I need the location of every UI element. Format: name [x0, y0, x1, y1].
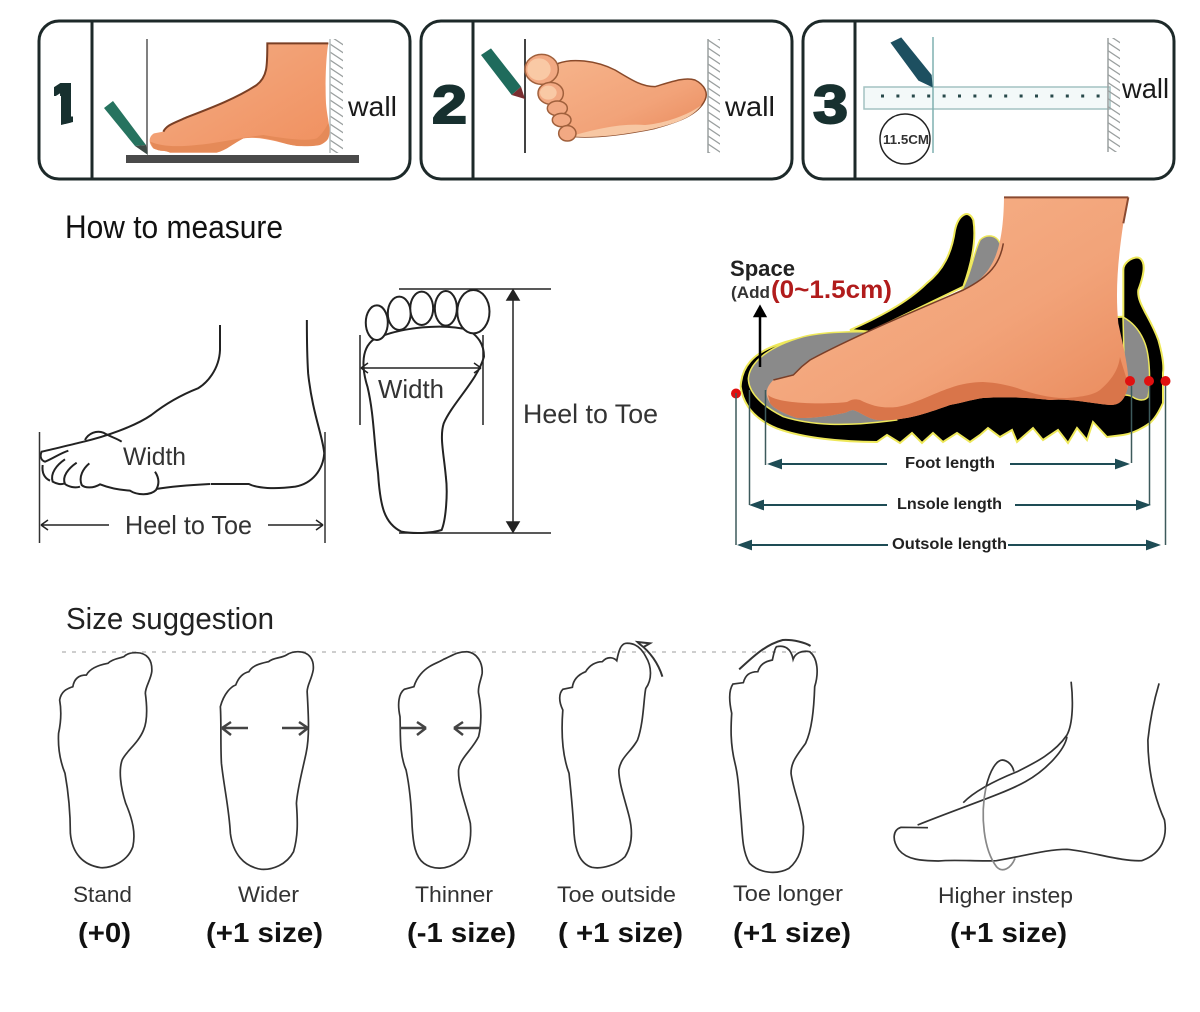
- foot outline: [560, 643, 650, 868]
- heading: how to measure: How to measure: [65, 209, 283, 245]
- foot length arrow: [770, 460, 1127, 468]
- foot top view with toes: [525, 54, 706, 141]
- label: Toe longer: [733, 881, 843, 906]
- label: Higher instep: [938, 883, 1073, 908]
- label: width: Width: [378, 374, 444, 404]
- toe reference dashed line: [62, 651, 822, 653]
- size change: (+0): [78, 917, 131, 948]
- shoe and foot illustration: [741, 197, 1163, 443]
- measuring guide line: [524, 39, 526, 153]
- foot side outline with instep ring: [894, 682, 1165, 870]
- label: heel to toe: Heel to Toe: [125, 510, 252, 540]
- size change: (-1 size): [407, 917, 516, 948]
- diagram: foot sole outline: [360, 289, 658, 533]
- red measuring dots: [731, 376, 1170, 398]
- label: space: Space: [730, 256, 795, 281]
- thinner arrows: [400, 722, 481, 735]
- toe arrow: [638, 642, 662, 677]
- measuring guide line: [146, 39, 148, 153]
- step number 2: 2: [432, 75, 467, 135]
- heading: size suggestion: Size suggestion: [66, 601, 274, 636]
- panel: step 3: [803, 21, 1174, 179]
- sole drawing with toes: [363, 290, 489, 533]
- size card: thinner: [399, 652, 516, 948]
- ruler with dots: [864, 87, 1110, 109]
- foot outline: [399, 652, 482, 868]
- size card: wider: [206, 652, 323, 948]
- label: width: Width: [123, 443, 186, 471]
- length extent lines: [736, 386, 1166, 545]
- measurement circle: 11.5CM: [883, 132, 929, 147]
- label: wall: wall: [1121, 73, 1169, 104]
- step number 3: 3: [813, 75, 848, 135]
- size change: ( +1 size): [558, 917, 683, 948]
- label: wall: wall: [724, 91, 775, 122]
- label: foot length: Foot length: [905, 455, 995, 472]
- label: add: (Add: [731, 283, 770, 302]
- label: Thinner: [415, 882, 493, 907]
- label: Toe outside: [557, 882, 676, 907]
- foot outline: [220, 652, 313, 869]
- label: heel to toe: Heel to Toe: [523, 399, 658, 429]
- label: Stand: [73, 882, 132, 907]
- side foot drawing: [41, 320, 324, 494]
- space arrow: [755, 307, 765, 367]
- size card: higher instep: [894, 682, 1165, 948]
- size card: toe longer: [730, 640, 851, 948]
- diagram: foot in shoe cross-section: [730, 197, 1170, 553]
- extent and dimension lines: [360, 289, 551, 533]
- outsole length arrow: [740, 541, 1158, 549]
- extent lines: [40, 432, 325, 543]
- dimension arrows: [41, 520, 323, 530]
- panel: step 1: [39, 21, 410, 179]
- wall hatch: [1108, 38, 1120, 152]
- diagram: foot side outline: [40, 320, 325, 543]
- wider arrows: [222, 722, 308, 735]
- foot outline: [58, 653, 152, 868]
- size card: toe outside: [557, 642, 683, 948]
- size change: (+1 size): [733, 917, 851, 948]
- floor bar: [126, 155, 359, 163]
- size card: stand: [58, 653, 152, 948]
- measurement circle: [880, 114, 930, 164]
- wall hatch: [330, 39, 343, 153]
- label: insole length: Lnsole length: [897, 496, 1002, 513]
- foot outline: [730, 646, 817, 872]
- pencil: [104, 101, 148, 155]
- wall hatch: [708, 39, 720, 153]
- insole length arrow: [752, 501, 1148, 509]
- panel: step 2: [421, 21, 792, 179]
- label: wall: wall: [347, 91, 397, 122]
- foot side view: [150, 43, 330, 153]
- measuring guide line: [932, 37, 934, 153]
- pencil: [481, 48, 525, 99]
- label: 0 to 1.5cm: (0~1.5cm): [771, 276, 892, 304]
- step number 1: 1: [48, 72, 80, 137]
- size change: (+1 size): [206, 917, 323, 948]
- pencil: [890, 37, 933, 87]
- size change: (+1 size): [950, 917, 1067, 948]
- label: Wider: [238, 882, 299, 907]
- toe arc: [739, 640, 811, 669]
- label: outsole length: Outsole length: [892, 536, 1007, 553]
